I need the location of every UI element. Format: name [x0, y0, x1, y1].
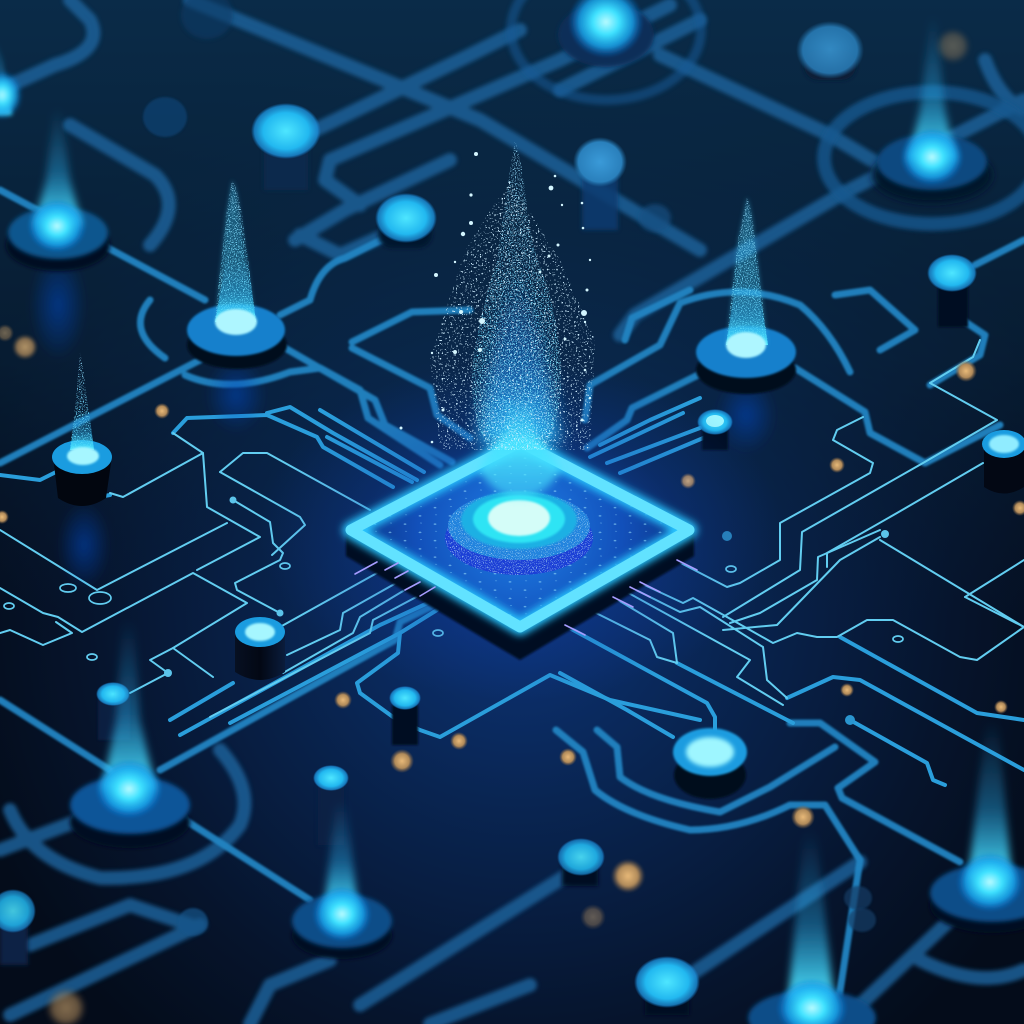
chip central disc [445, 491, 593, 575]
plume stream at chip [478, 395, 562, 498]
node: bottom centre emitter [292, 765, 392, 959]
node: left cylinder emitter [52, 352, 112, 589]
plume scatter [430, 180, 595, 450]
node: top centre glow [511, 0, 701, 100]
scattered sparkles [400, 152, 591, 443]
chip body [346, 530, 694, 660]
node: upper left emitter [6, 108, 110, 360]
node: lower left emitter [70, 620, 190, 848]
central particle plume [400, 140, 595, 498]
violet pin highlights [355, 560, 697, 635]
node: top right emitter [824, 15, 1024, 224]
node: lower left cylinder [235, 617, 285, 680]
mid-focus chip fan traces [0, 398, 1024, 785]
node: bottom right emitter [748, 830, 876, 1024]
chip glowing border [351, 442, 689, 627]
plume particles [472, 140, 561, 450]
node: right particle emitter [696, 197, 796, 453]
plume glow [478, 260, 560, 445]
chip glow halo [260, 360, 780, 700]
node: left particle emitter [187, 180, 287, 433]
node: lower right emitter [930, 720, 1024, 933]
central chip [260, 360, 780, 700]
node: lower right capsule [673, 728, 747, 799]
chip top face [351, 440, 689, 628]
fine foreground traces [0, 340, 1024, 725]
chip glowing border glow [351, 442, 689, 627]
node: corner glow top left [0, 40, 22, 119]
